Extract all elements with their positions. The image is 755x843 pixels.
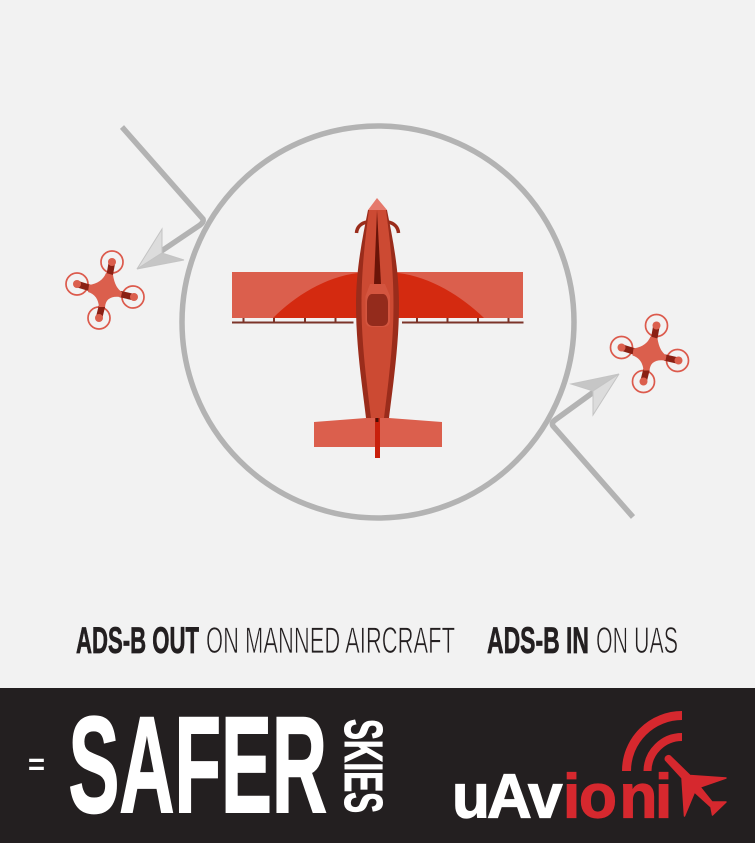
rotor hubs (73, 258, 138, 322)
caption: on UAS: ON UAS (596, 620, 678, 661)
left aileron (232, 318, 354, 322)
wings (232, 272, 523, 318)
fuselage spine (374, 210, 381, 284)
left exhaust (356, 222, 367, 233)
logo wordmark white: uAv (452, 762, 563, 832)
rudder (375, 418, 380, 458)
drone arms (622, 326, 678, 382)
drone body (88, 273, 122, 307)
fuselage body (362, 210, 394, 418)
fuselage outline (356, 210, 399, 418)
arrowhead light face (137, 229, 162, 269)
right exhaust (388, 222, 398, 233)
right aileron (402, 318, 524, 322)
arrowhead light face (593, 374, 619, 415)
icon: manned aircraft (232, 198, 524, 458)
icon: left drone (66, 251, 144, 329)
caption: ADS-B IN: ADS-B IN (487, 620, 589, 661)
arrow: incoming signal right (552, 374, 633, 517)
arrow shaft (552, 391, 633, 517)
headline: SAFER: SAFER (68, 689, 327, 842)
caption (76, 620, 678, 661)
arrow shaft (122, 127, 203, 252)
drone body (632, 336, 666, 370)
logo signal arc inner (648, 737, 682, 771)
arrow: outgoing signal left (122, 127, 203, 269)
equals sign: = (28, 748, 45, 781)
caption: ADS-B OUT: ADS-B OUT (76, 620, 199, 661)
footer band (0, 688, 755, 843)
rudder root (376, 418, 378, 422)
canopy glass (367, 294, 388, 326)
logo wordmark red: ioni (563, 762, 672, 832)
arrowhead dark face (571, 374, 619, 391)
tailplane (314, 418, 442, 447)
logo signal arc outer (626, 716, 682, 771)
canopy frame (366, 284, 390, 327)
drone arms (77, 262, 133, 318)
detection range circle (182, 126, 574, 518)
logo: uAvionix (452, 716, 726, 832)
wing centre section (273, 273, 484, 318)
rotor rings (66, 251, 144, 329)
rotor rings (610, 314, 688, 392)
rotor hubs (618, 322, 682, 386)
arrowhead dark face (137, 253, 184, 269)
logo plane (665, 756, 726, 816)
nose cone (368, 198, 387, 210)
caption: on manned aircraft: ON MANNED AIRCRAFT (206, 620, 455, 661)
icon: right drone (610, 314, 688, 392)
